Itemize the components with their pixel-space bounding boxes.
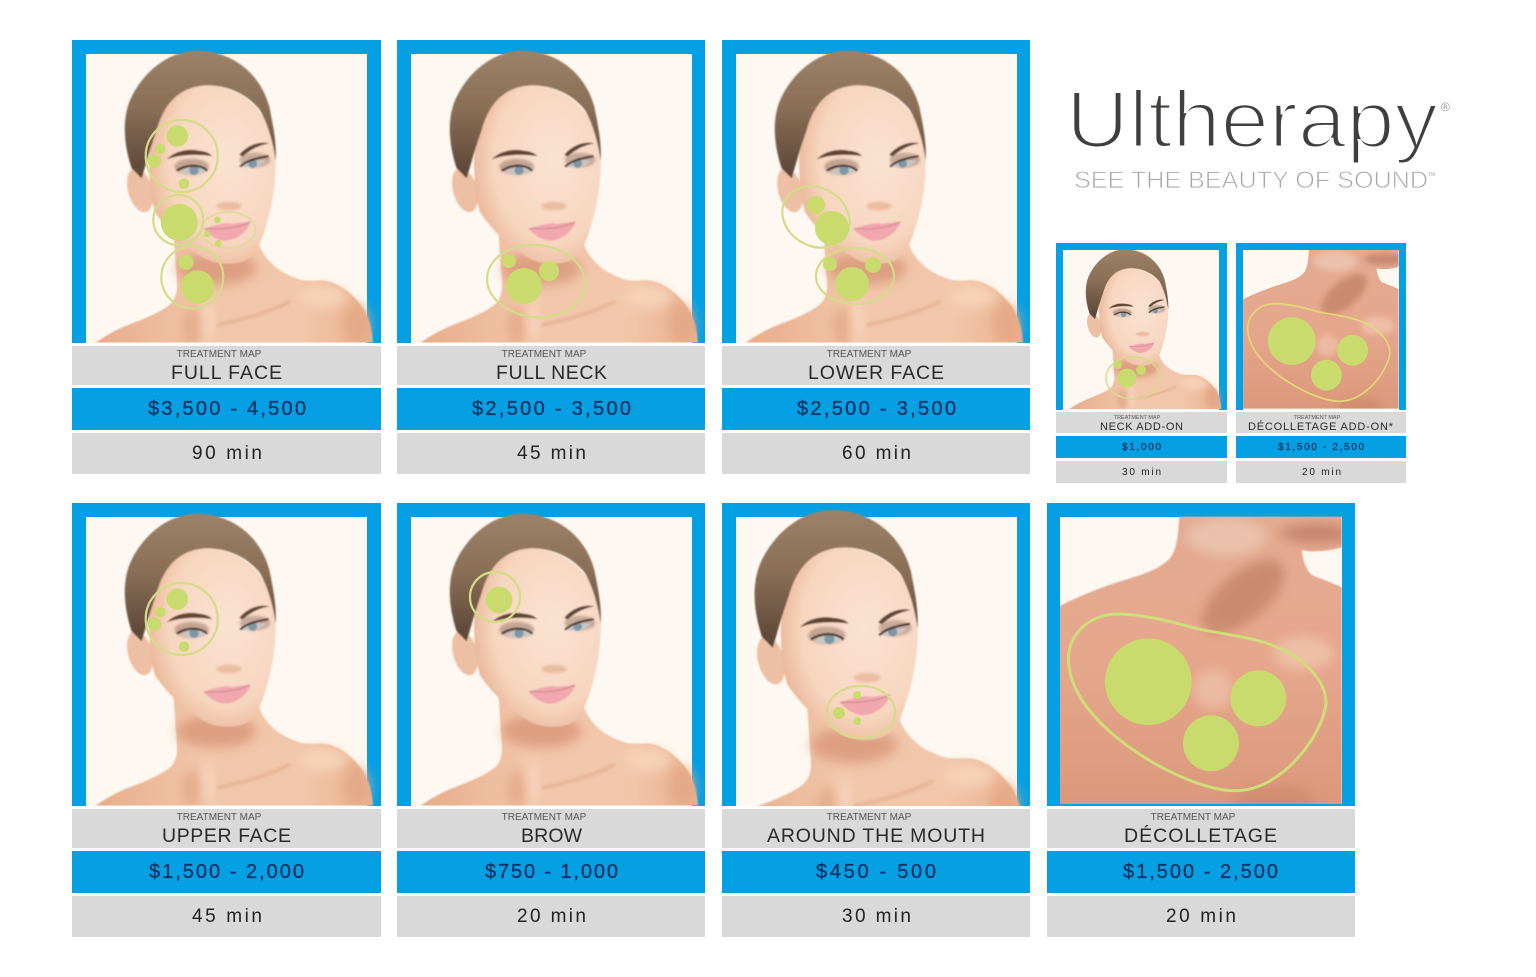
card: full face: TREATMENT MAP	[177, 349, 262, 360]
card: neck add-on: 30 min	[1122, 467, 1161, 478]
card: decolletage add-on: TREATMENT MAP	[1294, 415, 1341, 421]
photo frame	[722, 503, 1030, 806]
label: title	[722, 809, 1030, 848]
label: price	[722, 851, 1030, 893]
treatment zones	[1106, 357, 1160, 399]
card: brow: $750 - 1,000	[485, 861, 618, 883]
portrait	[90, 514, 373, 810]
card: full face	[72, 40, 381, 474]
card: decolletage: DÉCOLLETAGE	[1124, 824, 1277, 847]
card: upper face: 45 min	[192, 906, 262, 927]
label: title	[397, 346, 705, 385]
card: upper face	[72, 503, 381, 937]
card: around the mouth	[717, 503, 1030, 937]
card: decolletage add-on	[1236, 243, 1407, 483]
label: price	[72, 388, 381, 430]
card: brow: TREATMENT MAP	[502, 812, 587, 823]
card: full neck: FULL NECK	[496, 362, 607, 384]
logo: Ultherapy: TM	[1428, 172, 1435, 178]
card: lower face: $2,500 - 3,500	[797, 398, 956, 420]
portrait	[415, 514, 698, 810]
photo frame	[1236, 243, 1406, 410]
logo: Ultherapy: ®	[1441, 100, 1450, 114]
card: neck add-on: NECK ADD-ON	[1100, 421, 1183, 433]
card: full face: $3,500 - 4,500	[148, 398, 306, 420]
photo frame	[1056, 243, 1227, 410]
treatment zones	[1248, 304, 1390, 401]
card: around the mouth: TREATMENT MAP	[827, 812, 912, 823]
card: around the mouth: AROUND THE MOUTH	[767, 825, 985, 847]
photo frame	[1047, 503, 1355, 806]
photo frame	[72, 503, 381, 806]
card: full neck	[397, 40, 705, 474]
label: price	[72, 851, 381, 893]
label: title	[1047, 809, 1355, 848]
photo frame	[397, 503, 705, 806]
card: brow	[397, 503, 705, 937]
label: duration	[72, 896, 381, 937]
label: title	[1236, 412, 1406, 433]
portrait	[415, 51, 698, 347]
card: decolletage add-on: $1,500 - 2,500	[1278, 442, 1364, 453]
portrait	[90, 51, 373, 347]
card: full neck: TREATMENT MAP	[502, 349, 587, 360]
label: price	[1236, 436, 1406, 458]
card: full neck: 45 min	[517, 443, 586, 464]
label: title	[72, 346, 381, 385]
label: duration	[1236, 461, 1406, 483]
card: upper face: $1,500 - 2,000	[149, 861, 304, 883]
photo frame	[397, 40, 705, 343]
chest photo	[1060, 516, 1342, 804]
label: price	[1056, 436, 1227, 458]
card: decolletage: $1,500 - 2,500	[1123, 861, 1278, 883]
treatment zones	[470, 572, 520, 622]
label: duration	[72, 433, 381, 474]
treatment zones	[827, 686, 895, 738]
card: upper face: UPPER FACE	[162, 825, 291, 847]
chest photo	[1243, 250, 1398, 409]
card: lower face: 60 min	[842, 443, 911, 464]
card: decolletage add-on: DÉCOLLETAGE ADD-ON*	[1248, 420, 1394, 433]
label: duration	[1047, 896, 1355, 937]
label: price	[397, 851, 705, 893]
treatment zones	[146, 583, 218, 655]
card: full face: FULL FACE	[171, 362, 282, 384]
card: around the mouth: 30 min	[842, 906, 911, 927]
logo: Ultherapy: Ultherapy	[1066, 75, 1439, 165]
card: decolletage add-on: 20 min	[1302, 467, 1341, 478]
label: title	[397, 809, 705, 848]
treatment zones	[484, 241, 588, 321]
card: lower face: TREATMENT MAP	[827, 349, 912, 360]
card: neck add-on: $1,000	[1122, 442, 1161, 453]
card: brow: 20 min	[517, 906, 586, 927]
card: decolletage: TREATMENT MAP	[1151, 812, 1236, 823]
card: lower face: LOWER FACE	[808, 362, 944, 384]
logo: Ultherapy	[1066, 75, 1450, 194]
card: full neck: $2,500 - 3,500	[472, 398, 631, 420]
label: price	[397, 388, 705, 430]
label: title	[722, 346, 1030, 385]
portrait	[1067, 249, 1221, 411]
treatment zones	[146, 120, 255, 308]
label: price	[722, 388, 1030, 430]
card: brow: BROW	[521, 825, 583, 847]
label: duration	[1056, 461, 1227, 483]
portrait	[754, 509, 1028, 806]
treatment zones	[1068, 614, 1326, 791]
card: neck add-on	[1056, 243, 1227, 483]
card: full face: 90 min	[192, 443, 262, 464]
label: title	[72, 809, 381, 848]
card: neck add-on: TREATMENT MAP	[1114, 415, 1161, 421]
card: decolletage: 20 min	[1166, 906, 1236, 927]
label: price	[1047, 851, 1355, 893]
photo frame	[72, 40, 381, 343]
card: decolletage	[1047, 503, 1357, 937]
label: duration	[722, 433, 1030, 474]
card: around the mouth: $450 - 500	[816, 861, 936, 883]
label: duration	[397, 433, 705, 474]
tagline: SEE THE BEAUTY OF SOUND	[1074, 167, 1428, 194]
treatment zones	[771, 174, 894, 304]
label: duration	[722, 896, 1030, 937]
label: title	[1056, 412, 1227, 433]
card: upper face: TREATMENT MAP	[177, 812, 262, 823]
portrait	[740, 51, 1023, 347]
card: lower face	[722, 40, 1030, 474]
label: duration	[397, 896, 705, 937]
photo frame	[722, 40, 1030, 343]
